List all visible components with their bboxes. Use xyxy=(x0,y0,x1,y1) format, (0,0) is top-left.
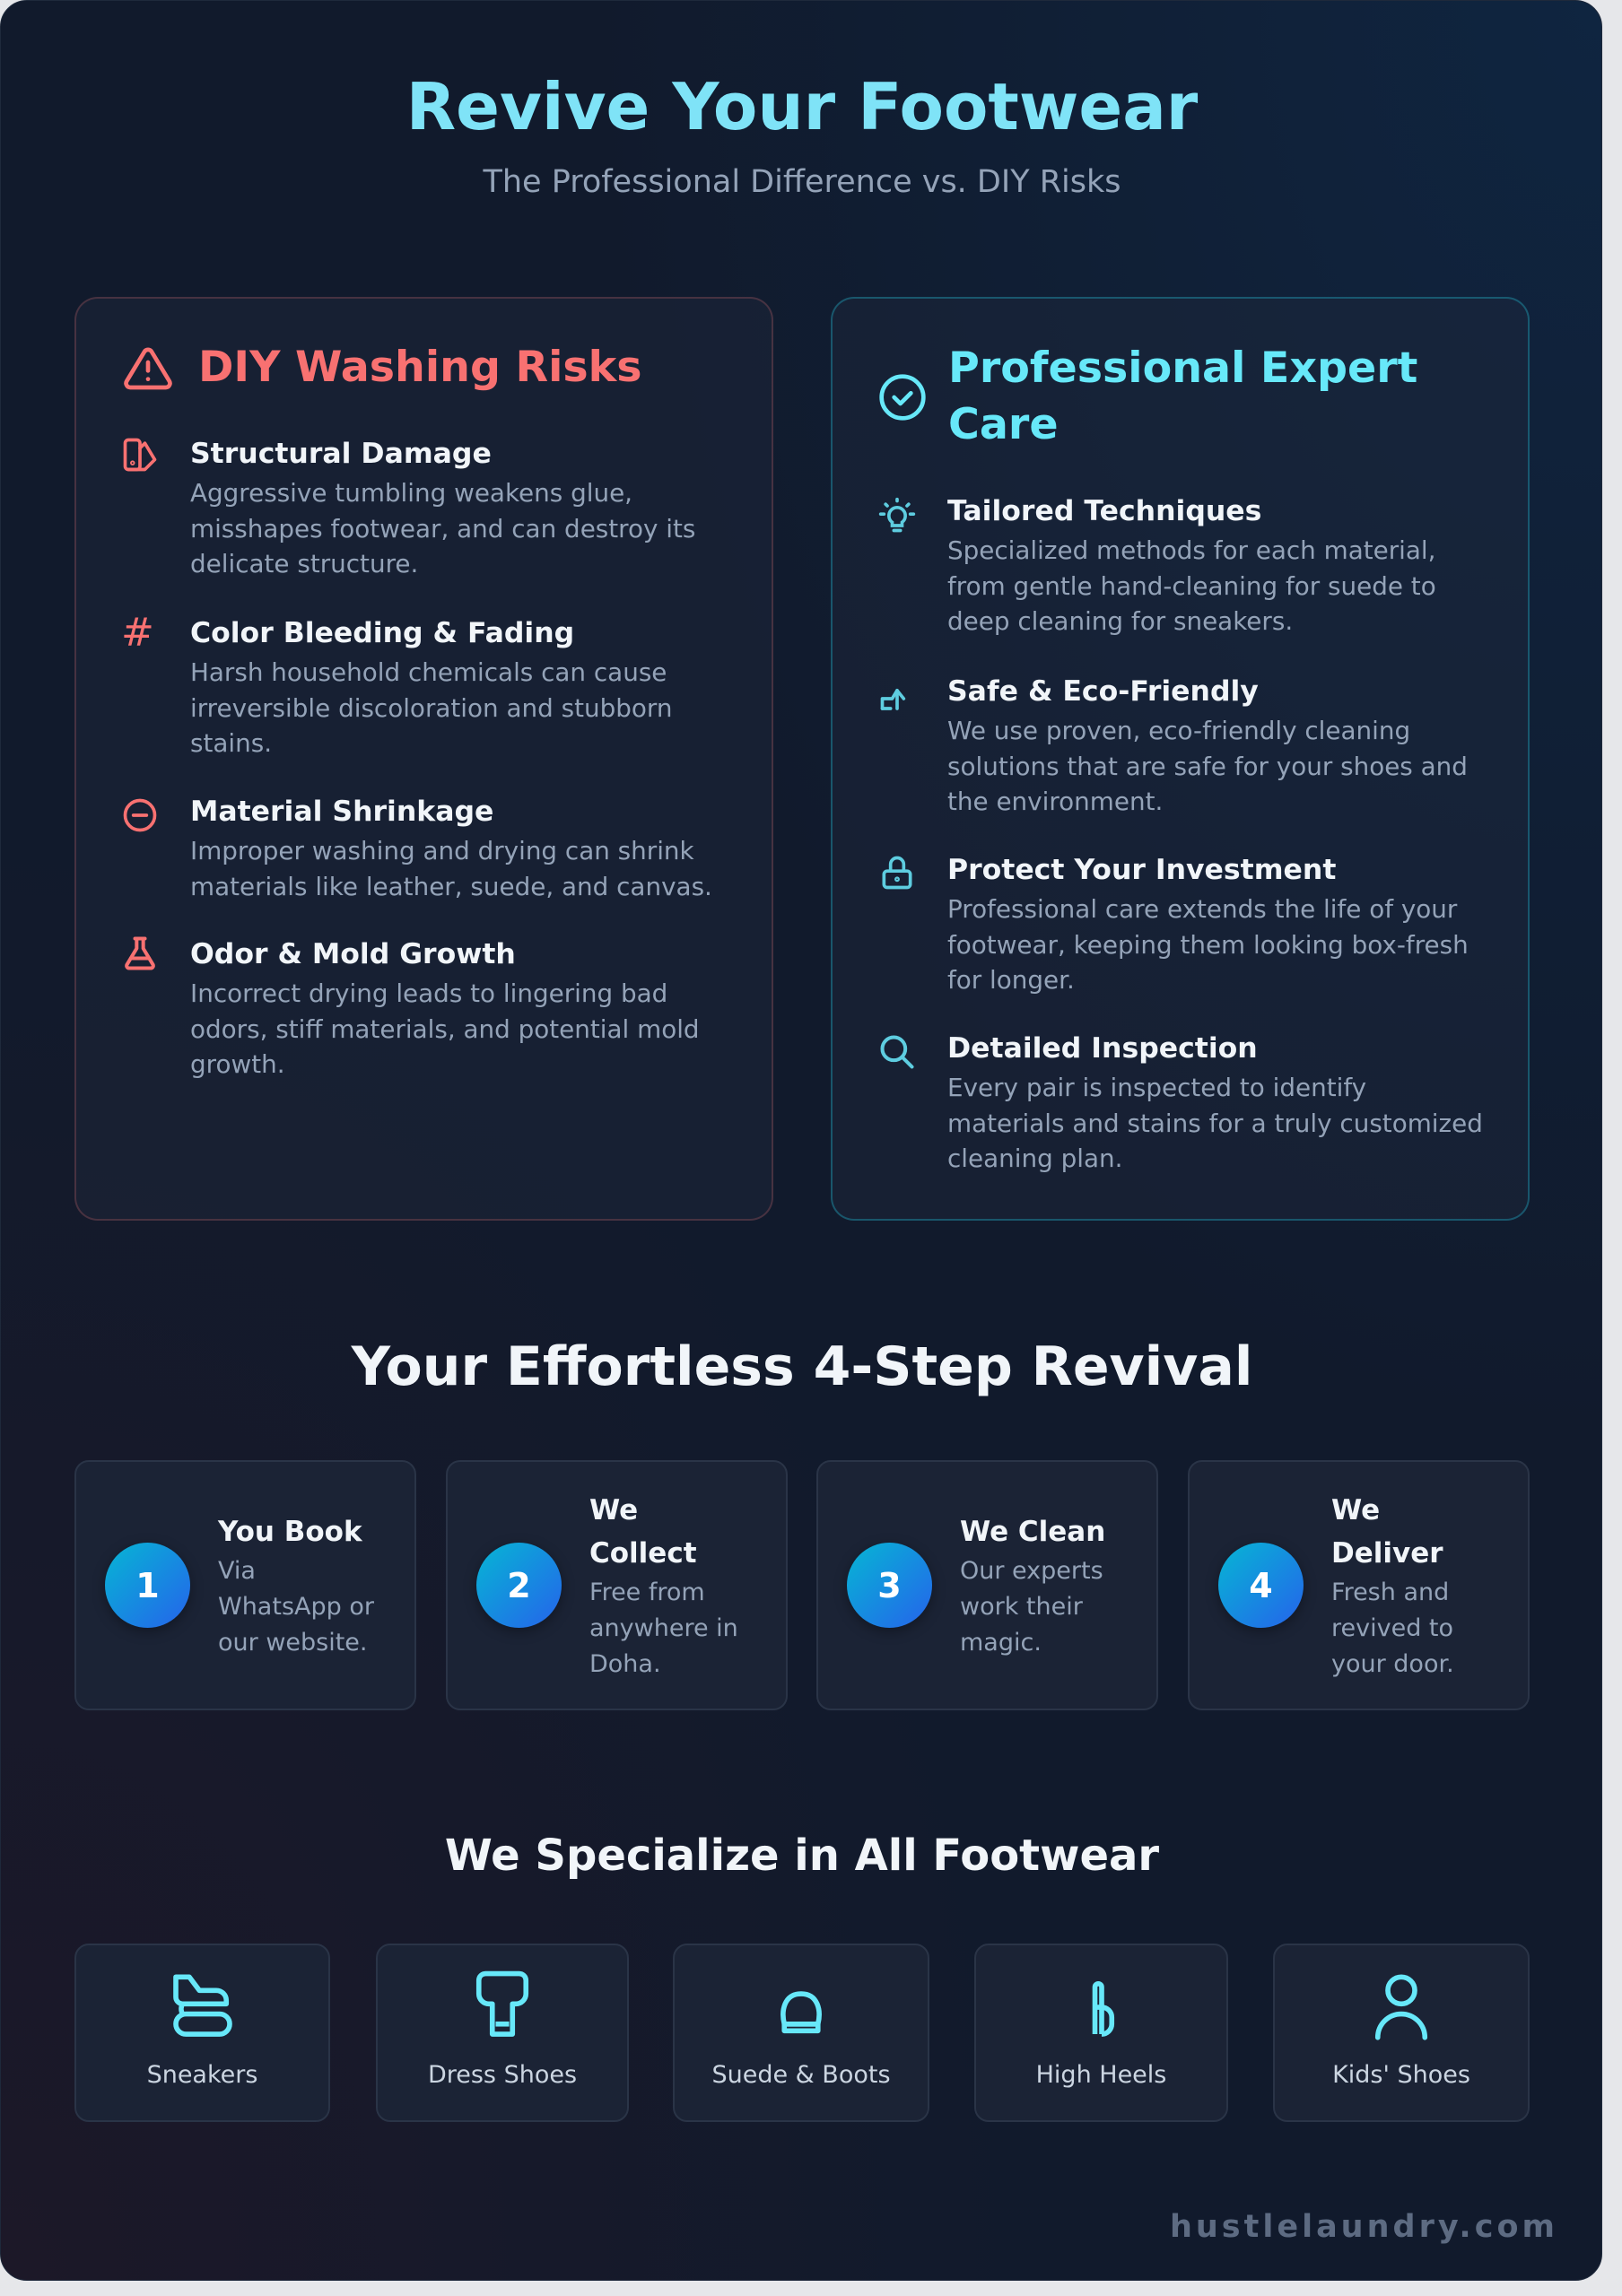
step 2 xyxy=(446,1460,788,1710)
item: structural damage: Aggressive tumbling weakens glue, xyxy=(190,478,632,508)
icon: structural damage xyxy=(124,438,156,472)
heading: 4-step revival: Your Effortless 4-Step Revival xyxy=(352,1335,1252,1398)
item: odor and mold: odors, stiff materials, and potential mold xyxy=(190,1013,700,1044)
card: suede and boots xyxy=(673,1944,929,2122)
heading: specialize: We Specialize in All Footwear xyxy=(445,1831,1159,1881)
step 4 xyxy=(1188,1460,1530,1710)
icon: lock xyxy=(883,856,911,890)
icon: check circle xyxy=(879,374,926,421)
item: structural damage xyxy=(190,438,695,578)
card: suede and boots: Suede & Boots xyxy=(711,2061,891,2089)
step 1: WhatsApp or xyxy=(218,1593,374,1620)
item: protect investment: for longer. xyxy=(947,965,1075,995)
step 1 xyxy=(74,1460,416,1710)
step 3: Our experts xyxy=(960,1557,1103,1584)
card: dress shoes xyxy=(376,1944,629,2122)
item: odor and mold: Incorrect drying leads to lingering bad xyxy=(190,978,667,1008)
card: sneakers: Sneakers xyxy=(147,2061,257,2089)
icon: eco xyxy=(881,689,906,710)
card: kids shoes: Kids' Shoes xyxy=(1332,2061,1470,2089)
step 2: Collect xyxy=(589,1537,697,1570)
icon: hash: # xyxy=(121,610,154,656)
heading: DIY Washing Risks: DIY Washing Risks xyxy=(198,343,642,392)
step 4: Deliver xyxy=(1331,1537,1443,1570)
card: high heels: High Heels xyxy=(1036,2061,1166,2089)
step 4: revived to xyxy=(1331,1614,1453,1641)
item: color bleeding: Harsh household chemicals can cause xyxy=(190,657,667,687)
item: material shrinkage: materials like leather, suede, and canvas. xyxy=(190,872,712,900)
item: tailored techniques: Tailored Techniques xyxy=(947,495,1261,527)
panel: professional care xyxy=(831,297,1530,1221)
heading: Professional Expert Care: Professional Expert xyxy=(948,344,1417,393)
item: tailored techniques: from gentle hand-cleaning for suede to xyxy=(947,570,1436,601)
step 2: Doha. xyxy=(589,1650,661,1677)
item: odor and mold: Odor & Mold Growth xyxy=(190,938,516,970)
item: tailored techniques: Specialized methods for each material, xyxy=(947,535,1435,565)
item: protect investment: Professional care extends the life of your xyxy=(947,894,1457,924)
item: protect investment: Protect Your Investment xyxy=(947,854,1336,886)
step 2: 2 xyxy=(507,1566,531,1605)
item: odor and mold: growth. xyxy=(190,1049,285,1079)
footer: website: hustlelaundry.com xyxy=(1170,2209,1558,2245)
item: detailed inspection: Every pair is inspected to identify xyxy=(947,1073,1366,1102)
item: safe eco-friendly: the environment. xyxy=(947,787,1163,816)
item: tailored techniques xyxy=(947,495,1436,636)
title: Revive Your Footwear xyxy=(406,69,1198,144)
step 4: your door. xyxy=(1331,1650,1454,1677)
icon: flask xyxy=(125,936,155,970)
icon: magnifier xyxy=(881,1035,914,1069)
heading: Professional Expert Care: Care xyxy=(948,400,1059,449)
step 2: We xyxy=(589,1494,638,1526)
step 1: You Book xyxy=(218,1516,362,1548)
heading: Professional Expert Care xyxy=(948,344,1417,449)
item: material shrinkage: Material Shrinkage xyxy=(190,796,493,828)
item: safe eco-friendly: We use proven, eco-friendly cleaning xyxy=(947,716,1410,745)
item: material shrinkage xyxy=(190,796,712,900)
item: detailed inspection: cleaning plan. xyxy=(947,1144,1122,1173)
step 1: 1 xyxy=(135,1566,160,1605)
step 1: our website. xyxy=(218,1629,368,1656)
step 3 xyxy=(816,1460,1158,1710)
item: structural damage: Structural Damage xyxy=(190,438,492,470)
item: safe eco-friendly xyxy=(947,675,1468,816)
card: dress shoes: Dress Shoes xyxy=(428,2061,577,2089)
item: color bleeding: irreversible discoloration and stubborn xyxy=(190,692,672,723)
step 1: Via xyxy=(218,1557,256,1584)
step 3: 3 xyxy=(877,1566,902,1605)
item: protect investment xyxy=(947,854,1469,995)
item: color bleeding: stains. xyxy=(190,728,272,758)
step 4: We xyxy=(1331,1494,1380,1526)
item: structural damage: misshapes footwear, and can destroy its xyxy=(190,513,695,544)
item: tailored techniques: deep cleaning for sneakers. xyxy=(947,606,1293,636)
icon: bulb xyxy=(879,497,915,533)
item: material shrinkage: Improper washing and drying can shrink xyxy=(190,836,694,865)
item: detailed inspection: materials and stains for a truly customized xyxy=(947,1109,1483,1137)
step 2: anywhere in xyxy=(589,1614,738,1641)
item: safe eco-friendly: Safe & Eco-Friendly xyxy=(947,675,1259,708)
item: odor and mold xyxy=(190,938,700,1079)
step 2: Free from xyxy=(589,1578,705,1605)
card: kids shoes xyxy=(1273,1944,1530,2122)
subtitle: The Professional Difference vs. DIY Risks xyxy=(483,164,1121,200)
item: safe eco-friendly: solutions that are safe for your shoes and xyxy=(947,752,1468,780)
icon: minus circle xyxy=(124,798,156,832)
item: structural damage: delicate structure. xyxy=(190,549,418,578)
step 3: We Clean xyxy=(960,1516,1105,1548)
step 3: magic. xyxy=(960,1629,1042,1656)
item: color bleeding: Color Bleeding & Fading xyxy=(190,617,574,649)
item: detailed inspection xyxy=(947,1032,1483,1173)
card: sneakers xyxy=(74,1944,330,2122)
step 4: Fresh and xyxy=(1331,1578,1449,1605)
icon: warning triangle xyxy=(124,348,172,389)
step 3: work their xyxy=(960,1593,1083,1620)
step 4: 4 xyxy=(1249,1566,1273,1605)
item: detailed inspection: Detailed Inspection xyxy=(947,1032,1258,1065)
card: high heels xyxy=(974,1944,1228,2122)
item: protect investment: footwear, keeping them looking box-fresh xyxy=(947,929,1469,960)
panel: DIY washing risks xyxy=(74,297,773,1221)
item: color bleeding xyxy=(190,617,672,758)
